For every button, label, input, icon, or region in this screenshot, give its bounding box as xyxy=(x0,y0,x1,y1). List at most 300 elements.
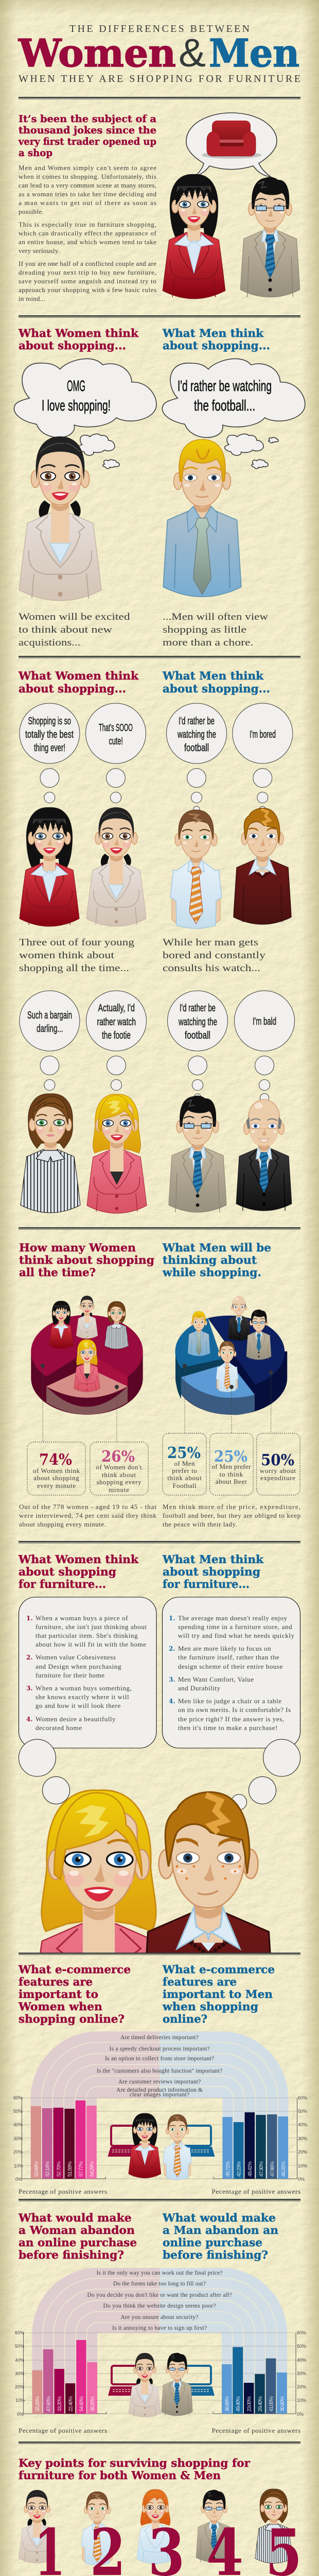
bar chart: men: 49.40% xyxy=(235,2396,241,2412)
text block: women stats xyxy=(19,1503,156,1528)
heading: men: online purchase xyxy=(163,2236,262,2249)
heading: women xyxy=(18,1553,139,1591)
thought panel: women: she knows exactly where it will xyxy=(36,1693,129,1701)
panel: e-commerce features xyxy=(13,1963,307,2195)
panel: key points xyxy=(19,2457,302,2576)
bubble text row two: I'm bald xyxy=(253,1016,276,1027)
chart grid and axes: 30% xyxy=(15,2371,24,2376)
chart grid and axes: 20% xyxy=(13,2149,23,2155)
heading: women: for furniture... xyxy=(19,1578,106,1591)
key point 5 xyxy=(249,2489,302,2576)
chart grid and axes: 10% xyxy=(15,2398,25,2403)
bar chart: women: 33.20% xyxy=(57,2396,63,2412)
bubble text row one: That's SOOO xyxy=(99,722,133,734)
thought cloud: women xyxy=(14,359,156,469)
chart grid and axes: 20% xyxy=(298,2149,307,2155)
thought panel: men: the furniture itself, rather than the xyxy=(178,1653,279,1661)
chart grid and axes: 40% xyxy=(297,2358,306,2363)
chart grid and axes: 60% xyxy=(13,2095,23,2100)
arch question labels: Is an option to collect from store important? xyxy=(105,2056,214,2062)
arch question labels: Is it the only way you can work out the final price? xyxy=(97,2270,222,2276)
bar chart: women: 54.29% xyxy=(89,2161,95,2177)
chart grid and axes: 50% xyxy=(298,2109,307,2114)
stat box: 26 percent: 26% xyxy=(101,1448,135,1466)
text block: intro paragraphs: can lead to a very common scene at many stores, xyxy=(19,181,156,189)
arch question labels: Do you decide you don't like or want the product after all? xyxy=(87,2292,232,2298)
arch question labels: Are you unsure about security? xyxy=(120,2314,199,2320)
heading: men: while shopping. xyxy=(162,1266,261,1279)
thought bubbles row two xyxy=(20,991,294,1103)
bubble text row one: I'd rather be xyxy=(179,716,215,727)
stat box: 25 percent beer xyxy=(210,1433,253,1495)
bubble text row one: thing ever! xyxy=(34,742,65,754)
key point 2 xyxy=(78,2492,126,2576)
axis captions xyxy=(19,2427,300,2434)
bubble text row two: Actually, I'd xyxy=(98,1003,135,1014)
chart grid and axes: 60% xyxy=(298,2095,307,2100)
heading: men: for furniture... xyxy=(163,1578,250,1591)
heading: women xyxy=(19,1242,154,1279)
thought panel: men: Men like to judge a chair or a table xyxy=(178,1697,281,1705)
text block: women: to think about new xyxy=(19,624,112,635)
text block: intro paragraphs: when it comes to shopping. Unfortunately, this xyxy=(19,173,156,180)
stat box: 74 percent: about shopping xyxy=(33,1474,79,1482)
text block: men xyxy=(163,612,268,648)
heading: women: features are xyxy=(19,1976,93,1989)
heading: women: What would make xyxy=(18,2212,132,2225)
bubble text row one: totally the best xyxy=(25,729,74,740)
bubble text row two: football xyxy=(185,1030,210,1041)
bubble text row one xyxy=(25,716,276,754)
thought panel: men: on its own merits. Is it comfortable? Is xyxy=(178,1706,291,1714)
axis captions: Pecentage of positive answers xyxy=(212,2427,300,2434)
heading: women: important to xyxy=(19,1988,98,2001)
arch question labels: Is a speedy checkout process important? xyxy=(109,2046,210,2052)
thought panel: women: 4. xyxy=(26,1716,33,1723)
heading: intro: very first trader opened up xyxy=(18,136,156,147)
chart grid and axes: 50% xyxy=(15,2344,24,2349)
heading: key points xyxy=(19,2457,251,2482)
arch question labels xyxy=(97,2035,222,2098)
bar chart: women xyxy=(32,2340,97,2414)
text block: men: consults his watch... xyxy=(163,963,260,974)
stat box: 74 percent: every minute xyxy=(37,1482,76,1489)
icon: computers and figures xyxy=(108,2113,215,2180)
text block: intro paragraphs xyxy=(19,164,157,302)
thought panel: men: spending time in a furniture store, and xyxy=(178,1623,292,1631)
heading: men: What Men think xyxy=(162,327,264,340)
bar chart: men: 47.86% xyxy=(270,2161,276,2177)
chart grid and axes: 10% xyxy=(14,2163,23,2168)
thought cloud: men: the football... xyxy=(194,397,255,414)
heading: women: What e-commerce xyxy=(18,1963,131,1976)
heading: intro: thousand jokes since the xyxy=(19,125,156,136)
heading: men: What Men will be xyxy=(162,1242,271,1255)
bubble text row one: watching the xyxy=(177,729,216,740)
figure: woman in beige xyxy=(19,436,101,601)
stat box: 74 percent: of Women think xyxy=(33,1467,80,1475)
bar chart: men: 48.41% xyxy=(247,2161,253,2177)
heading: women: What Women think xyxy=(18,1553,139,1566)
title xyxy=(18,23,300,84)
bubble text row two: rather watch xyxy=(97,1016,136,1028)
axis captions: Pecentage of positive answers xyxy=(19,2427,107,2434)
bubble text row one: Shopping is so xyxy=(28,716,71,727)
text block: men: more than a chore. xyxy=(163,637,253,648)
chart grid and axes: 30% xyxy=(13,2136,23,2141)
thought panel: women: When a woman buys a piece of xyxy=(36,1614,128,1622)
chart grid and axes: 0% xyxy=(15,2177,22,2182)
text block: intro paragraphs: possible. xyxy=(19,208,44,215)
thought panel: women: 1. xyxy=(26,1615,33,1622)
text block: women xyxy=(19,937,135,974)
title: Men xyxy=(209,31,299,76)
key point 4 xyxy=(196,2490,243,2576)
chart grid and axes: 40% xyxy=(298,2122,307,2127)
heading: women: shopping online? xyxy=(19,2013,125,2026)
arch question labels: clear images important? xyxy=(130,2092,189,2098)
thought panel: women: go and how it will look there xyxy=(36,1702,121,1709)
pie chart: men xyxy=(175,1296,287,1415)
text block: women: shopping all the time... xyxy=(19,963,129,974)
heading: women: How many Women xyxy=(19,1242,136,1255)
text block: women xyxy=(19,612,130,648)
stat box: 25 percent beer: about Beer xyxy=(216,1478,247,1485)
text block: men: shopping as little xyxy=(163,624,246,635)
heading: women xyxy=(18,670,139,696)
bar chart: women: 22.40% xyxy=(68,2396,74,2412)
thought cloud: men xyxy=(162,359,305,469)
chart grid and axes: 0% xyxy=(17,2412,24,2417)
figure: man in blue shirt xyxy=(163,439,241,597)
bar chart: women: 53.69% xyxy=(33,2161,40,2177)
title: THE DIFFERENCES BETWEEN xyxy=(69,23,250,35)
panel: thought bubbles xyxy=(18,670,295,1213)
heading: men: What Men think xyxy=(162,670,264,683)
chart grid and axes: 50% xyxy=(297,2344,306,2349)
tiny bubbles behind heads xyxy=(71,1794,247,1810)
heading: men: online? xyxy=(163,2013,207,2026)
text block: women: Three out of four young xyxy=(19,937,135,948)
heading: men xyxy=(162,670,270,696)
stat box: 26 percent: shopping every xyxy=(97,1478,141,1486)
key point 1 xyxy=(19,2490,66,2576)
thought panel: women: furniture for their home xyxy=(36,1671,104,1679)
bar chart: women: 47.60% xyxy=(45,2396,51,2412)
bar chart: men: 23.00% xyxy=(246,2396,252,2412)
axis captions: Pecentage of positive answers xyxy=(19,2188,107,2195)
thought cloud: women: OMG xyxy=(67,378,85,395)
thought panel: women: When a woman buys something, xyxy=(36,1684,132,1692)
thought panel: men: The average man doesn't really enjoy xyxy=(178,1614,287,1622)
stat box: 25 percent beer: to think xyxy=(220,1470,243,1478)
heading: women: a Woman abandon xyxy=(19,2224,135,2237)
chart grid and axes: 60% xyxy=(15,2330,24,2335)
heading: men: about shopping xyxy=(163,1566,260,1579)
axis captions: Pecentage of positive answers xyxy=(212,2188,300,2195)
bubble text row one: cute! xyxy=(109,736,123,747)
bar chart: men: 47.30% xyxy=(258,2161,264,2177)
key point 3 xyxy=(134,2489,185,2576)
thought panel: men: Men Want Comfort, Value xyxy=(178,1675,254,1683)
bubble text row one: football xyxy=(184,742,209,754)
thought panel: men: Men are more likely to focus on xyxy=(178,1645,271,1652)
panel: thinking about shopping for furniture xyxy=(19,1554,300,1953)
text block: men xyxy=(163,937,266,974)
stat box: 50 percent xyxy=(257,1433,300,1495)
bar chart: men: 30.60% xyxy=(279,2396,286,2412)
stat box: 74 percent: 74% xyxy=(39,1451,72,1469)
thought panel: men xyxy=(163,1597,300,1804)
stat box: 25 percent football: Football xyxy=(173,1482,197,1489)
text block: intro paragraphs: Men and Women simply can't seem to agree xyxy=(19,164,156,172)
bar chart: men: 45.71% xyxy=(225,2161,231,2177)
heading: women: What Women think xyxy=(18,670,139,683)
panel: pie charts xyxy=(19,1242,300,1528)
text block: men: bored and constantly xyxy=(163,950,266,961)
bar chart: men: 36.80% xyxy=(224,2396,231,2412)
icon: computers and figures xyxy=(108,2353,215,2417)
thought panel: men: design scheme of their entire house xyxy=(178,1663,283,1670)
title: Women xyxy=(18,31,176,76)
bubble text row two: Such a bargain xyxy=(27,1010,72,1021)
heading: women: think about shopping xyxy=(19,1254,154,1267)
text block: men: While her man gets xyxy=(163,937,258,948)
heading: men: important to Men xyxy=(163,1988,273,2001)
arch question labels: Are detailed product information & xyxy=(116,2087,203,2093)
text block: intro paragraphs: a man wants to get out of there as soon as xyxy=(19,199,156,207)
heading: men: thinking about xyxy=(163,1254,257,1267)
heading: men: What would make xyxy=(162,2212,276,2225)
heading: men: about shopping... xyxy=(163,340,270,352)
chart grid and axes: 10% xyxy=(298,2163,307,2168)
thought panel: women: 2. xyxy=(26,1654,33,1661)
title: & xyxy=(179,31,206,75)
text block: women: women think about xyxy=(19,950,115,961)
heading: men: about shopping... xyxy=(163,683,270,696)
arch question labels: Are customer reviews important? xyxy=(118,2079,201,2085)
chart grid and axes: 20% xyxy=(297,2384,306,2389)
heading: men xyxy=(162,1242,271,1279)
arch question labels xyxy=(87,2270,232,2331)
heading: women: Women when xyxy=(18,2001,102,2013)
heading: women xyxy=(18,327,139,352)
thought panel: women xyxy=(19,1597,156,1804)
text block: intro paragraphs: dreading your next trip to buy new furniture, xyxy=(19,268,156,276)
bar chart: women: 54.60% xyxy=(78,2396,84,2412)
heading: men xyxy=(162,1963,275,2026)
panel: introduction xyxy=(18,113,300,302)
axis captions xyxy=(19,2188,300,2195)
thought panel: men: 1. xyxy=(169,1615,175,1622)
stat box: 50 percent: 50% xyxy=(261,1451,294,1469)
arch question labels: Do you think the website design seems poor? xyxy=(103,2303,216,2309)
speech bubble with sofa xyxy=(186,113,277,177)
thought panel: men: then it's time to make a purchase! xyxy=(178,1724,278,1732)
thought panel: men: 4. xyxy=(169,1698,175,1705)
bar chart: men xyxy=(222,2347,287,2414)
heading: women: about shopping xyxy=(19,1566,116,1579)
heading: women: about shopping... xyxy=(19,340,126,352)
panel: abandoning an online purchase xyxy=(15,2212,306,2434)
thought panel: men: 3. xyxy=(169,1676,175,1683)
figures row two xyxy=(21,1094,292,1213)
figures row one xyxy=(20,807,291,928)
thought bubbles row one xyxy=(20,703,293,812)
bar chart: men xyxy=(222,2112,288,2179)
text block: men stats: Men think more of the price, expenditure, xyxy=(163,1503,300,1511)
thought cloud: women: I love shopping! xyxy=(42,397,111,414)
bubble text row two xyxy=(27,1003,276,1041)
chart grid and axes xyxy=(15,2330,306,2417)
text block: intro paragraphs: an entire house, and which women tend to take xyxy=(19,238,156,246)
thought panel: women: and Design when purchasing xyxy=(36,1663,121,1670)
heading: men xyxy=(162,327,270,352)
chart grid and axes xyxy=(13,2095,307,2182)
chart grid and axes: 50% xyxy=(13,2109,23,2114)
thought panel: women: furniture, she isn't just thinking about xyxy=(36,1623,147,1631)
text block: women: Women will be excited xyxy=(19,612,130,622)
thought panel: men: 2. xyxy=(169,1645,175,1652)
text block: men stats xyxy=(163,1503,300,1528)
title: WHEN THEY ARE SHOPPING FOR FURNITURE xyxy=(19,73,300,84)
thought panel: women: 3. xyxy=(26,1685,33,1692)
heading: women: What Women think xyxy=(18,327,139,340)
heading: men: when shopping xyxy=(162,2001,258,2013)
heading: intro xyxy=(18,113,156,159)
heading: men: features are xyxy=(163,1976,237,1989)
stat box: 26 percent: think about xyxy=(102,1471,136,1479)
chart grid and axes: 40% xyxy=(15,2358,24,2363)
bar chart: women: 38.20% xyxy=(90,2396,96,2412)
chart grid and axes: 0% xyxy=(298,2177,305,2182)
text block: women stats: Out of the 778 women - aged 19 to 45 - that xyxy=(19,1503,156,1511)
heading: men xyxy=(162,2212,278,2262)
thought panel: women: about how it will fit in with the home xyxy=(36,1640,146,1648)
text block: men stats: the peace with their lady. xyxy=(163,1520,237,1528)
text block: men stats: football and beer, but they are obliged to keep xyxy=(163,1512,300,1519)
text block: intro paragraphs: If you are one half of a conflicted couple and are xyxy=(19,260,156,267)
chart grid and axes: 20% xyxy=(15,2384,24,2389)
chart grid and axes: 30% xyxy=(298,2136,307,2141)
bubble text row two: the footie xyxy=(102,1030,131,1041)
heading: women xyxy=(18,2212,137,2262)
bar chart: men: 29.40% xyxy=(257,2396,263,2412)
stat box: 25 percent football: of Men xyxy=(174,1460,195,1467)
bar chart: women: 51.59% xyxy=(67,2161,73,2177)
chart grid and axes: 30% xyxy=(297,2371,306,2376)
heading: women: about shopping... xyxy=(19,683,126,696)
figure: man in tan suit xyxy=(240,177,300,297)
chart grid and axes: 60% xyxy=(297,2330,306,2335)
bar chart: men: 42.23% xyxy=(236,2161,242,2177)
figure: large blonde woman xyxy=(40,1789,157,1953)
stat box: 26 percent: of Women don't xyxy=(96,1463,142,1471)
stat box: 25 percent football: prefer to xyxy=(172,1467,197,1475)
bar chart: women: 32.20% xyxy=(34,2396,41,2412)
bubble text row two: darling... xyxy=(37,1023,63,1035)
bar chart: women: 52.14% xyxy=(44,2161,50,2177)
text block: intro paragraphs: as a woman tries to take her time deciding and xyxy=(19,190,156,198)
chart grid and axes: 40% xyxy=(13,2122,23,2127)
heading: key points: furniture for both Women & Men xyxy=(19,2469,221,2482)
stat box: 25 percent football xyxy=(163,1433,206,1495)
stat box: 25 percent beer: of Men prefer xyxy=(211,1463,251,1470)
thought panel: men: the price right? If the answer is yes, xyxy=(178,1715,284,1723)
stat box: 26 percent xyxy=(90,1442,148,1495)
arch question labels: Is the "customers also bought function" important? xyxy=(97,2068,222,2074)
text block: women stats: about shopping every minute. xyxy=(19,1520,106,1528)
text block: women stats: were interviewed, 74 per cent said they think xyxy=(19,1512,156,1519)
text block: women: acquistions... xyxy=(19,637,80,648)
heading: women: an online purchase xyxy=(19,2236,137,2249)
heading: men xyxy=(162,1553,264,1591)
leader lines and pins xyxy=(41,1364,273,1442)
text block: intro paragraphs: approach your shopping with a few basic rules xyxy=(19,286,156,294)
text block: men: ...Men will often view xyxy=(163,612,268,622)
heading: women: before finishing? xyxy=(19,2249,124,2262)
arch question labels: Do the forms take too long to fill out? xyxy=(113,2281,206,2287)
heading: key points: Key points for surviving shopping for xyxy=(19,2457,251,2470)
thought panel: women: Women desire a beautifully xyxy=(36,1715,116,1723)
stat box: 50 percent: worry about xyxy=(260,1467,296,1475)
bar chart: women xyxy=(31,2100,97,2179)
text block: intro paragraphs: very seriously. xyxy=(19,247,60,255)
thought panel: women: Women value Cohesiveness xyxy=(36,1653,116,1661)
stat box: 25 percent beer: 25% xyxy=(214,1448,247,1466)
stat box: 25 percent football: 25% xyxy=(167,1444,201,1462)
bar chart: women: 57.77% xyxy=(78,2161,84,2177)
heading: intro: a shop xyxy=(19,147,52,159)
heading: women: all the time? xyxy=(19,1266,96,1279)
heading: men: a Man abandon an xyxy=(163,2224,278,2237)
arch question labels: Is it annoying to have to sign up first? xyxy=(112,2325,207,2331)
arch bands xyxy=(32,2268,287,2414)
bar chart: women: 52.70% xyxy=(56,2161,62,2177)
bubble text row two: watching the xyxy=(178,1016,217,1028)
bar chart: men: 46.31% xyxy=(280,2161,287,2177)
bubble text row one: I'm bored xyxy=(250,729,276,740)
text block: intro paragraphs: in mind... xyxy=(19,295,45,302)
stat box: 25 percent football: think about xyxy=(167,1474,202,1482)
bubble text row two: I'd rather be xyxy=(180,1003,216,1014)
stat box: 26 percent: minute xyxy=(109,1486,129,1494)
thought panel: women: that particular item. She's thinking xyxy=(36,1632,138,1639)
chart grid and axes: 10% xyxy=(297,2398,306,2403)
thought panel: women: decorated home xyxy=(36,1724,82,1732)
heading: men: before finishing? xyxy=(163,2249,268,2262)
heading: women xyxy=(18,1963,131,2026)
arch question labels: Are timed deliveries important? xyxy=(120,2035,199,2041)
thought panel: men: and Durability xyxy=(178,1684,220,1692)
heading: men: What e-commerce xyxy=(162,1963,275,1976)
text block: intro paragraphs: save yourself some anguish and instead try to xyxy=(19,277,156,285)
stat box: 50 percent: expenditure xyxy=(260,1474,295,1482)
figure: large ginger man xyxy=(146,1791,271,1953)
heading: intro: It’s been the subject of a xyxy=(19,113,156,125)
stat box: 74 percent xyxy=(27,1442,85,1495)
icon: red armchair xyxy=(202,121,261,159)
chart grid and axes: 0% xyxy=(297,2412,304,2417)
text block: intro paragraphs: which can drastically effect the appearance of xyxy=(19,229,157,237)
bar chart: men: 41.00% xyxy=(269,2396,275,2412)
figure: woman in red xyxy=(163,174,225,299)
panel: what women and men think about shopping xyxy=(14,327,305,648)
text block: intro paragraphs: This is especially true in furniture shopping, xyxy=(19,221,156,228)
pie chart: women xyxy=(31,1296,143,1415)
heading: men: What Men think xyxy=(162,1553,264,1566)
thought panel: men: will try and find what he needs quickly xyxy=(178,1632,294,1639)
